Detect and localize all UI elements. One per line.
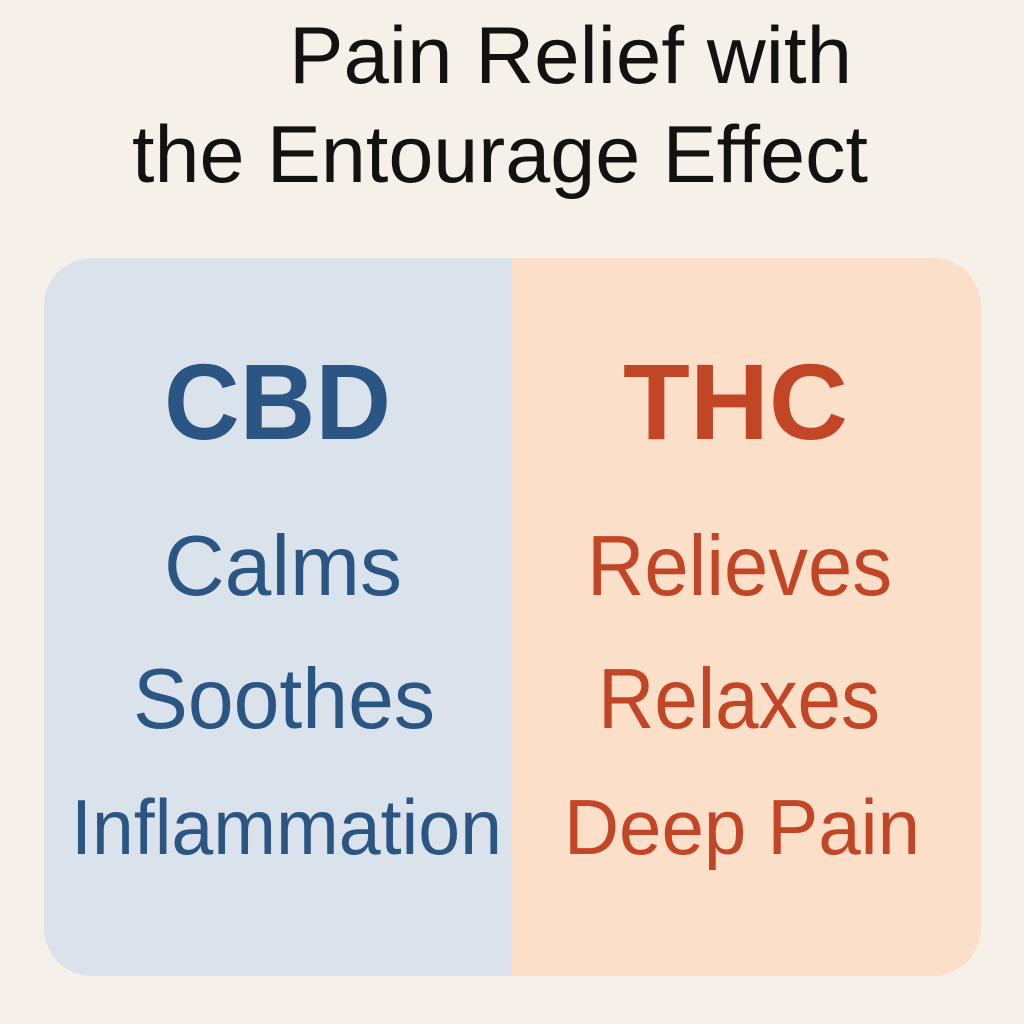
title: the Entourage Effect — [132, 110, 868, 200]
text: Relaxes: Relaxes — [598, 652, 880, 747]
title: Pain Relief with — [289, 11, 852, 101]
heading: CBD: CBD — [164, 341, 391, 462]
text: Soothes: Soothes — [133, 652, 435, 747]
panel: THC — [512, 258, 981, 976]
text: Inflammation: Inflammation — [71, 783, 502, 871]
text: Relieves: Relieves — [587, 519, 892, 614]
panel: CBD — [44, 258, 512, 976]
title — [132, 11, 868, 200]
text: Calms: Calms — [164, 519, 402, 614]
text: Deep Pain: Deep Pain — [564, 783, 920, 871]
heading: THC: THC — [623, 341, 848, 462]
